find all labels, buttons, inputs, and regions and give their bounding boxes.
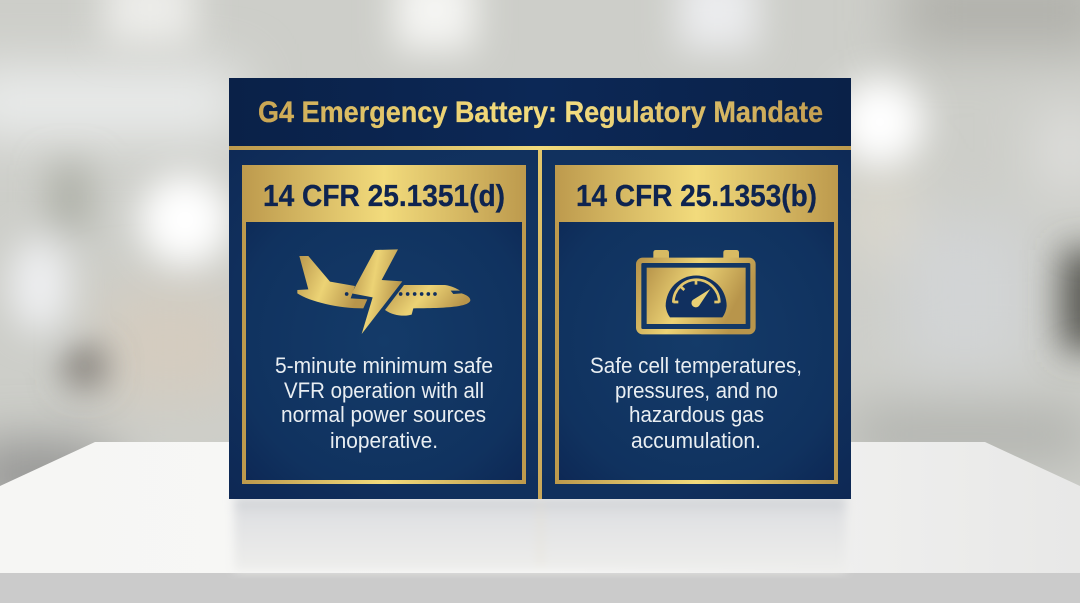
- description right: [590, 353, 802, 453]
- description left: normal power sources: [281, 402, 486, 427]
- centre divider: [538, 150, 542, 499]
- description right: accumulation.: [631, 428, 761, 453]
- description right: pressures, and no: [615, 378, 778, 403]
- panel reflection on table: [234, 497, 846, 571]
- heading right: 14 CFR 25.1353(b): [576, 178, 817, 213]
- heading left: 14 CFR 25.1351(d): [263, 178, 505, 213]
- panel: 14 CFR 25.1353(b): [555, 165, 838, 482]
- icon: battery with gauge: [639, 250, 753, 332]
- description left: 5-minute minimum safe: [275, 353, 493, 378]
- description right: Safe cell temperatures,: [590, 353, 802, 378]
- heading bar right: [555, 165, 838, 222]
- description left: [275, 353, 493, 453]
- description left: VFR operation with all: [284, 378, 484, 403]
- heading bar left: [242, 165, 526, 222]
- icon: airplane struck by lightning: [297, 249, 470, 334]
- panel: 14 CFR 25.1351(d): [242, 165, 526, 482]
- title bar: [229, 78, 851, 150]
- table: [0, 442, 1080, 603]
- description left: inoperative.: [330, 428, 438, 453]
- main panel: [229, 78, 851, 499]
- title: G4 Emergency Battery: Regulatory Mandate: [258, 96, 823, 129]
- gauge: [666, 275, 727, 317]
- description right: hazardous gas: [629, 402, 764, 427]
